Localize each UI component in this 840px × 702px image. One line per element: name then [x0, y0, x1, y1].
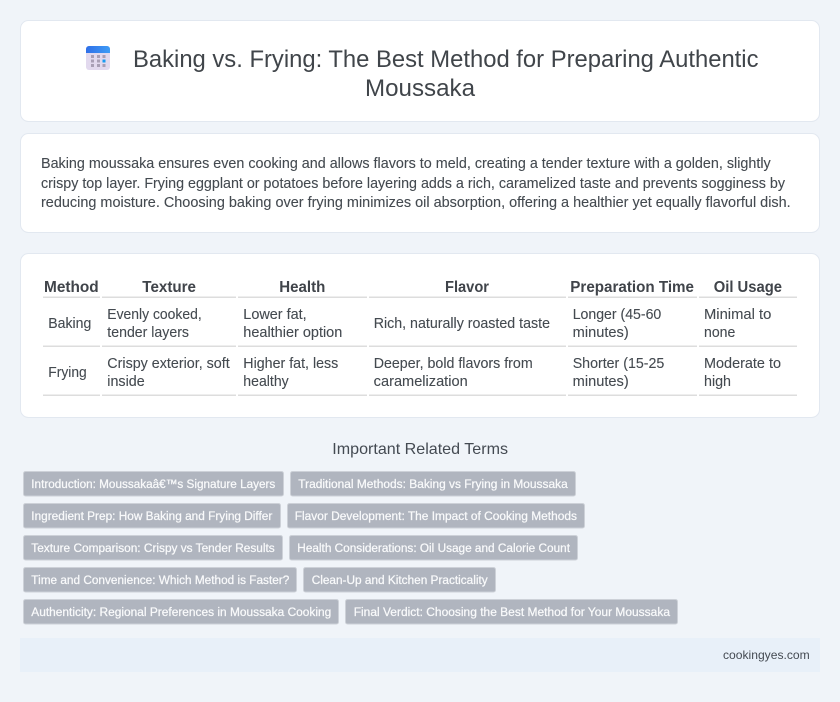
tag: Health Considerations: Oil Usage and Calorie Count	[297, 541, 571, 555]
tag: Ingredient Prep: How Baking and Frying Differ	[31, 509, 272, 523]
tag	[304, 568, 496, 592]
tag	[24, 568, 296, 592]
tag	[24, 536, 282, 560]
tag	[24, 504, 280, 528]
table row: frying: Shorter (15-25	[573, 356, 664, 372]
intro text: crispy top layer. Frying eggplant or potatoes before layering adds a rich, caramelized taste and prevents sogginess by	[41, 176, 786, 192]
table row: frying: inside	[107, 374, 145, 390]
table row: frying: Higher fat, less	[243, 356, 338, 372]
footer	[20, 638, 820, 672]
table row: baking: Lower fat,	[243, 307, 307, 323]
heading: important related terms: Important Related Terms	[332, 441, 508, 458]
table row: frying: Moderate to	[704, 356, 781, 372]
table row: baking	[48, 307, 771, 341]
table row: frying: high	[704, 374, 731, 390]
table header: Flavor	[445, 279, 489, 296]
tag	[346, 600, 678, 624]
tag: Authenticity: Regional Preferences in Moussaka Cooking	[31, 605, 331, 619]
table row: frying: healthy	[243, 374, 290, 390]
tag: Clean-Up and Kitchen Practicality	[312, 573, 489, 587]
table row: baking: none	[704, 325, 735, 341]
table row: frying: caramelization	[374, 374, 468, 390]
tag	[24, 600, 338, 624]
tag: Introduction: Moussakaâ€™s Signature Layers	[31, 477, 275, 491]
panel: comparison table	[20, 254, 820, 418]
table row: baking: tender layers	[107, 325, 189, 341]
table header	[44, 279, 782, 296]
tag: Final Verdict: Choosing the Best Method for Your Moussaka	[354, 605, 670, 619]
table row: baking: healthier option	[243, 325, 342, 341]
table header: Oil Usage	[714, 279, 782, 296]
tag list: related terms	[24, 472, 678, 624]
icon: calendar	[86, 46, 110, 70]
tag: Time and Convenience: Which Method is Faster?	[31, 573, 290, 587]
intro text	[41, 156, 791, 211]
table row: frying: Deeper, bold flavors from	[374, 356, 533, 372]
table row: frying: Crispy exterior, soft	[107, 356, 230, 372]
title: Moussaka	[365, 75, 476, 102]
table header: Method	[44, 279, 99, 296]
table row: baking: Minimal to	[704, 307, 771, 323]
intro text: reducing moisture. Choosing baking over frying minimizes oil absorption, offering a healthier yet equally flavorful dish.	[41, 195, 791, 211]
table row: baking: Baking	[48, 316, 91, 332]
table row: frying	[48, 356, 781, 390]
tag: Flavor Development: The Impact of Cooking Methods	[295, 509, 577, 523]
tag: Texture Comparison: Crispy vs Tender Results	[31, 541, 275, 555]
intro text: Baking moussaka ensures even cooking and allows flavors to meld, creating a tender texture with a golden, slightly	[41, 156, 772, 172]
table row: baking: Evenly cooked,	[107, 307, 202, 323]
tag	[288, 504, 584, 528]
panel: introduction	[20, 134, 820, 232]
table row: frying: minutes)	[573, 374, 629, 390]
table row: frying: Frying	[48, 365, 87, 381]
panel: title header	[20, 20, 820, 122]
table row: baking: minutes)	[573, 325, 629, 341]
footer source text: cookingyes.com	[723, 648, 810, 662]
table header: Preparation Time	[570, 279, 694, 296]
tag	[290, 536, 578, 560]
table header: Health	[279, 279, 325, 296]
tag	[290, 472, 576, 496]
table row: baking: Rich, naturally roasted taste	[374, 316, 550, 332]
title: Baking vs. Frying: The Best Method for Preparing Authentic	[133, 46, 758, 73]
table row: baking: Longer (45-60	[573, 307, 661, 323]
title	[133, 46, 758, 102]
tag	[24, 472, 284, 496]
table header: Texture	[142, 279, 196, 296]
tag: Traditional Methods: Baking vs Frying in Moussaka	[298, 477, 568, 491]
